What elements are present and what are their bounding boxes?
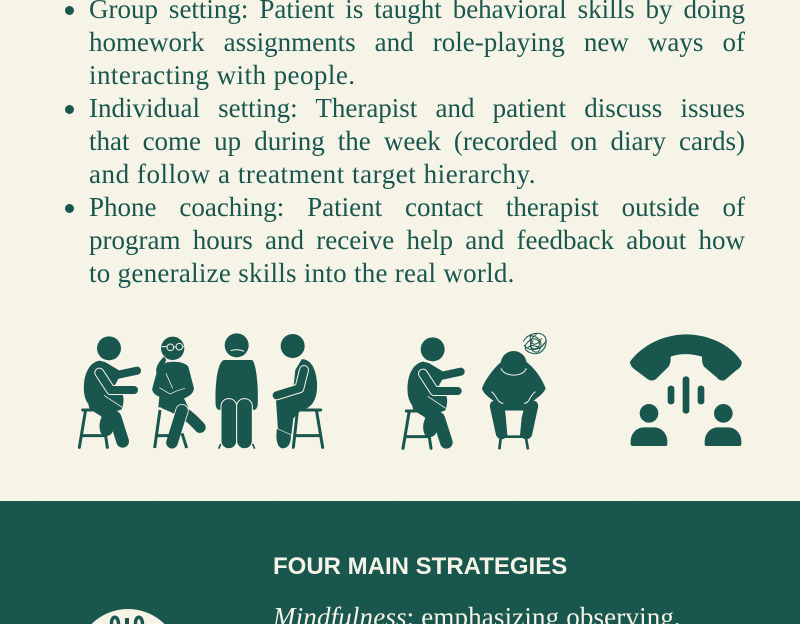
figure: frowning front-facing person: [215, 333, 258, 449]
figure: slumped person: [482, 333, 547, 449]
text: individual setting: and follow a treatment target hierarchy.: [89, 159, 536, 189]
figure: seated person in profile: [276, 334, 323, 449]
text: individual setting: that come up during the week (recorded on diary cards): [89, 126, 745, 156]
icon: phone handset with sound bars and two people: [630, 334, 742, 446]
figure: woman with glasses, legs crossed: [152, 337, 200, 448]
text: phone coaching: program hours and receive help and feedback about how: [89, 225, 745, 255]
panel: four main strategies: [0, 501, 800, 624]
text: individual setting: [89, 93, 745, 189]
heading: four main strategies: FOUR MAIN STRATEGIES: [273, 553, 567, 580]
bullet: individual setting: [65, 105, 74, 114]
text: group setting: homework assignments and role-playing new ways of: [89, 27, 745, 57]
text: phone coaching: to generalize skills into the real world.: [89, 258, 515, 288]
text: individual setting: Individual setting: Therapist and patient discuss issues: [89, 93, 745, 123]
text: group setting: [89, 0, 745, 90]
text: phone coaching: Phone coaching: Patient contact therapist outside of: [89, 192, 745, 222]
figure: speaking patient on stool: [403, 337, 461, 448]
text: group setting: interacting with people.: [89, 60, 355, 90]
icon: individual therapy pair: [402, 332, 742, 450]
bullet list: therapy settings: [65, 6, 74, 213]
icon: mindfulness circle badge: [92, 609, 164, 624]
bullet: phone coaching: [65, 204, 74, 213]
icon: group therapy people: [78, 333, 324, 449]
figure: speaking patient on stool: [79, 336, 137, 447]
text: phone coaching: [89, 192, 745, 288]
bullet: group setting: [65, 6, 74, 15]
